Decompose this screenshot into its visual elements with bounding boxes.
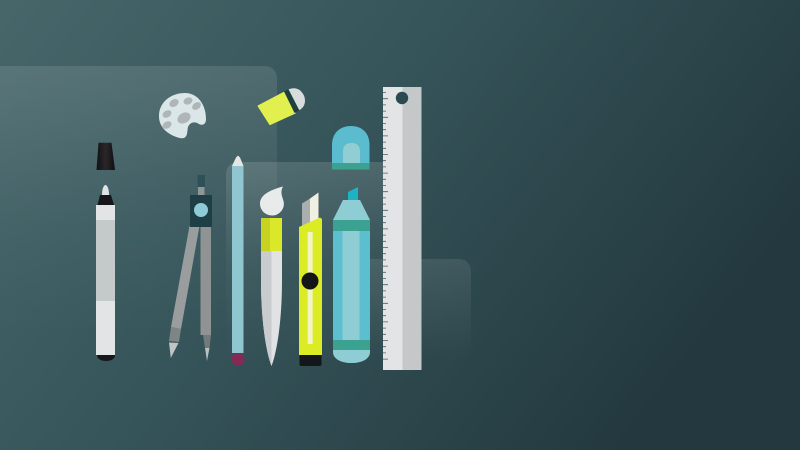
panel: large glass card [0,66,277,340]
panel: small glass card [370,259,471,360]
icon: utility knife [299,192,322,366]
icon: drawing compass [169,175,212,361]
icon: pencil [232,156,244,366]
icon: paintbrush [260,186,284,366]
icon: paint palette [159,93,206,138]
icon: marker cap [96,143,115,170]
icon: ruler [383,87,422,370]
icon: highlighter cap [332,126,370,170]
panel: centre glass card [226,162,385,370]
icon: marker [96,185,115,361]
icon: eraser [258,88,305,124]
icon: highlighter [333,187,370,363]
